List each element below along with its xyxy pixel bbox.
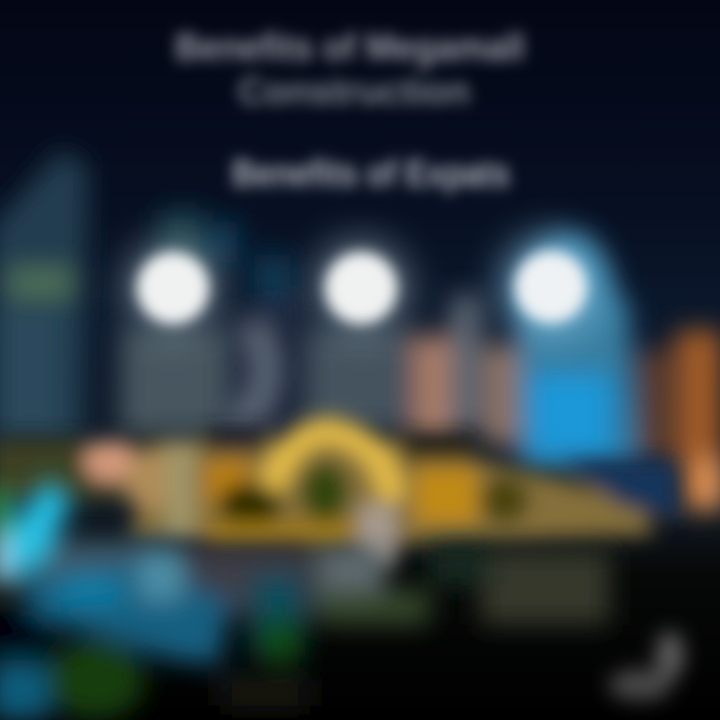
cyan bright reflection xyxy=(8,478,72,585)
dark roof centre xyxy=(402,436,472,460)
skyline towers xyxy=(0,150,720,510)
icon halo and circle 2 xyxy=(311,238,411,338)
tower: far left xyxy=(0,150,88,440)
title line 1: Benefits of Megamall xyxy=(175,27,525,69)
water reflections xyxy=(0,478,610,720)
black water gap xyxy=(0,615,50,650)
arched roof xyxy=(270,430,392,500)
title block xyxy=(175,27,525,195)
ground band xyxy=(0,440,140,500)
icon halo and circle 3 xyxy=(499,233,603,337)
tower: curved centre xyxy=(225,290,295,440)
green foliage xyxy=(45,640,145,720)
tower: blue dome xyxy=(518,234,636,470)
dark blue roof right xyxy=(565,460,680,520)
green openings xyxy=(218,483,282,527)
icon halo and circle 1 xyxy=(123,238,223,338)
tower: peach xyxy=(412,335,454,440)
mall base xyxy=(205,522,370,548)
grey reflection xyxy=(30,540,180,580)
tower: left centre xyxy=(120,330,225,435)
title line 2: Construction xyxy=(238,71,470,113)
benefit icons: three glowing circles xyxy=(123,233,603,338)
orange wings xyxy=(205,460,250,505)
mall structure xyxy=(0,428,680,565)
tower: middle xyxy=(305,330,410,430)
towers: right orange xyxy=(636,350,670,460)
logo watermark xyxy=(608,631,684,701)
bottom left blue xyxy=(0,660,50,720)
blue water pool xyxy=(20,565,230,665)
glowing pink spot xyxy=(84,442,136,482)
subtitle: Benefits of Expats xyxy=(232,153,510,195)
